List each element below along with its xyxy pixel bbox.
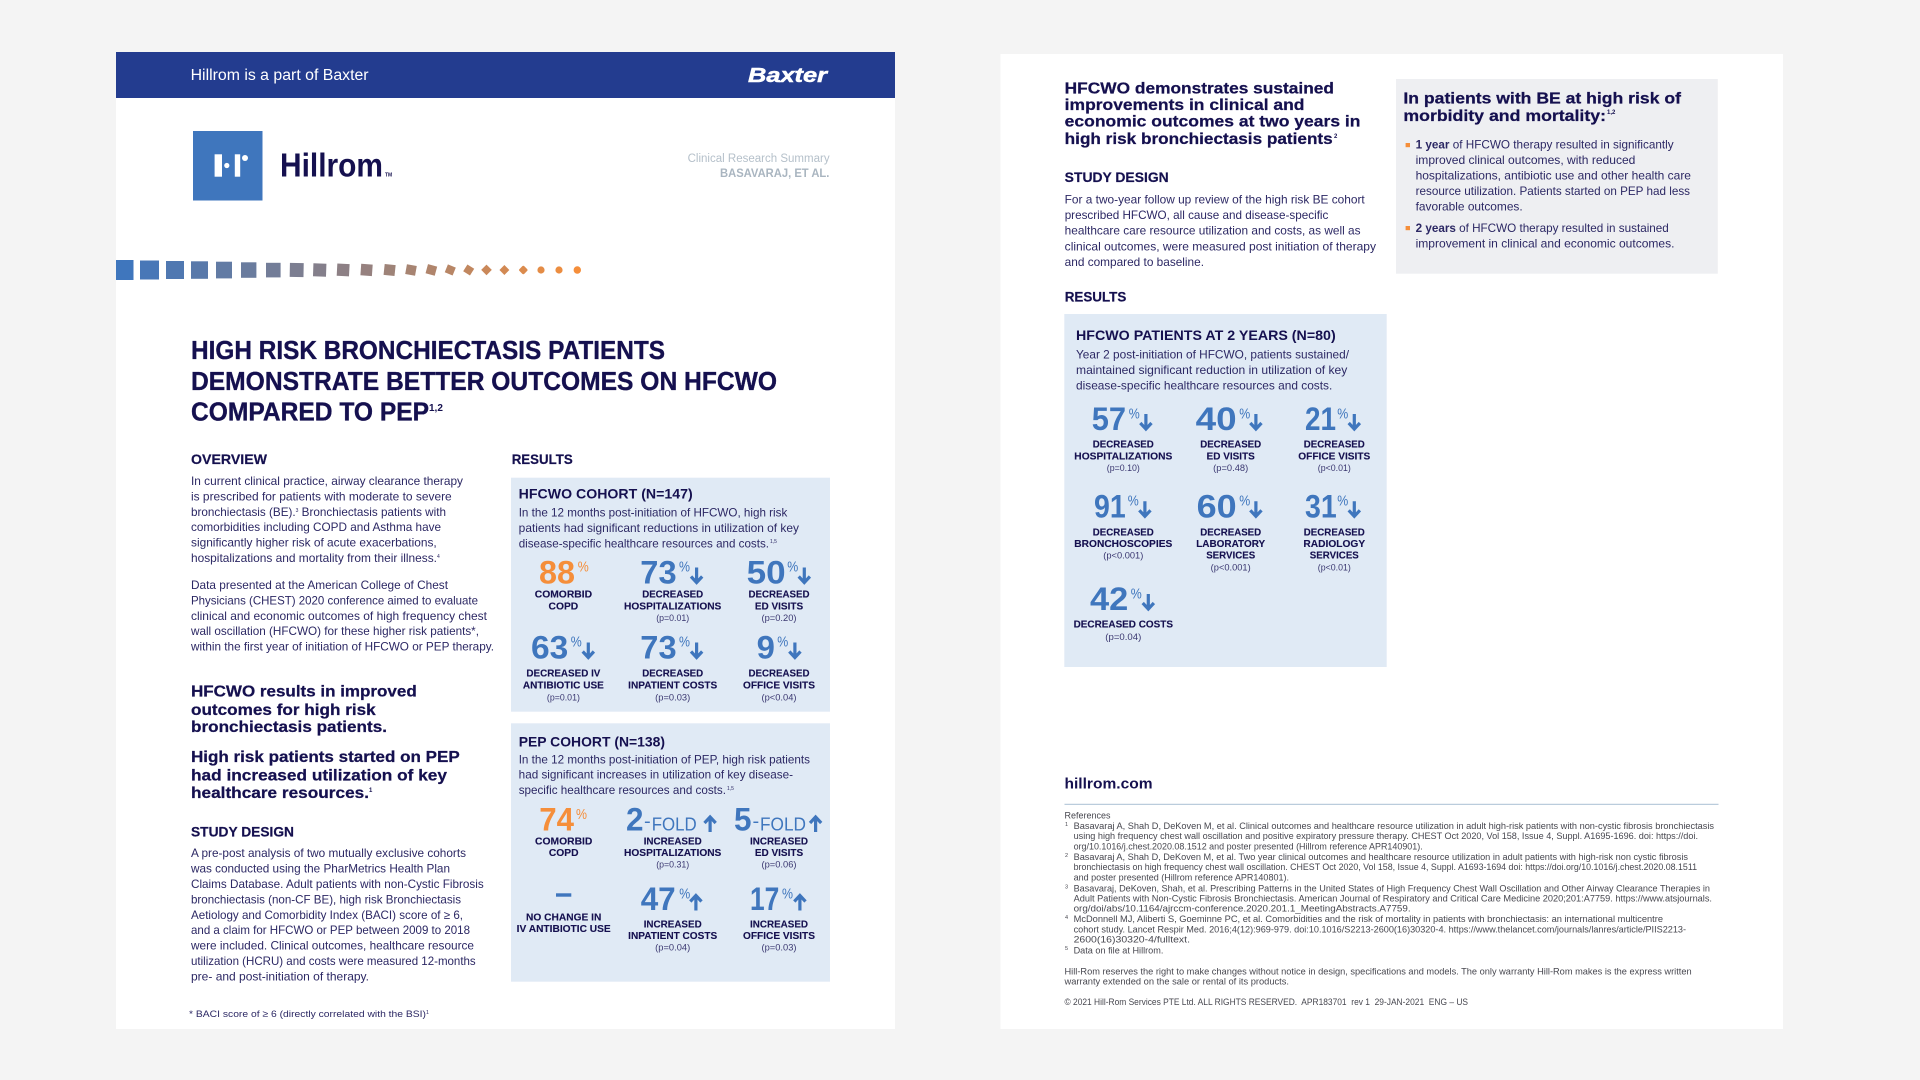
stat: 60% decreased laboratory services	[1196, 488, 1266, 573]
panel intro text: 1,5	[770, 539, 777, 545]
panel intro text: patients had significant reductions in utilization of key	[519, 522, 799, 535]
stat: 73% decreased hospitalizations: %	[679, 559, 690, 576]
stat: 40% decreased ED visits	[1196, 401, 1262, 473]
panel: HFCWO cohort	[511, 478, 830, 712]
overview text	[190, 475, 494, 654]
stat: 9% decreased office visits: OFFICE VISITS	[743, 680, 815, 691]
study design text: was conducted using the PharMetrics Health Plan	[190, 863, 450, 876]
stat: 2-fold increased hospitalizations: -	[644, 811, 651, 831]
key finding: PEP	[191, 749, 460, 802]
stat: 91% decreased bronchoscopies: BRONCHOSCOPIES	[1074, 539, 1173, 550]
overview text: bronchiectasis (BE).	[191, 506, 296, 519]
stat: 40% decreased ED visits: %	[1239, 405, 1250, 422]
stat: 42% decreased costs: %	[1131, 585, 1142, 602]
stat: 40% decreased ED visits: (p=0.48)	[1213, 463, 1248, 473]
stat: 21% decreased office visits	[1298, 401, 1371, 473]
stat: 60% decreased laboratory services: %	[1239, 493, 1250, 510]
takeaway heading: morbidity and mortality:	[1403, 108, 1606, 125]
stat: 5-fold increased ED visits: 5	[734, 802, 752, 838]
takeaway heading: In patients with BE at high risk of	[1403, 90, 1682, 107]
stat: 91% decreased bronchoscopies: (p<0.001)	[1103, 551, 1143, 561]
overview text: In current clinical practice, airway clearance therapy	[191, 475, 463, 488]
bullet: 1 year: 1 year of HFCWO therapy resulted in significantly	[1416, 138, 1674, 151]
stat: 88% comorbid COPD	[535, 554, 592, 612]
heading: sustained improvements: 2	[1334, 134, 1338, 140]
stat: 40% decreased ED visits: 40	[1196, 401, 1237, 437]
stat: 9% decreased office visits: (p<0.04)	[762, 692, 797, 702]
overview text: Bronchiectasis patients with	[298, 506, 446, 519]
stat: 74% comorbid COPD: 74	[539, 802, 574, 838]
stat: 60% decreased laboratory services: (p<0.001)	[1211, 563, 1251, 573]
stat: 50% decreased ED visits: %	[787, 559, 798, 576]
stat: 74% comorbid COPD: COPD	[549, 848, 579, 859]
stat: 50% decreased ED visits: 50	[747, 554, 786, 590]
panel intro text: disease-specific healthcare resources and costs.	[1076, 379, 1332, 392]
bullet: 2 years	[1406, 222, 1674, 251]
references: Adult Patients with Non-Cystic Fibrosis Bronchiectasis. American Journal of Respiratory and Critical Care Medicine 2020;201:A7759. https://www.atsjournals.	[1074, 893, 1712, 903]
stat: 73% decreased hospitalizations: 73	[640, 554, 677, 590]
panel intro text: In the 12 months post-initiation of PEP, high risk patients	[519, 753, 810, 766]
stat: 60% decreased laboratory services: DECREASED	[1200, 527, 1261, 538]
footnote: 1	[426, 1010, 429, 1016]
references: 4	[1065, 915, 1068, 921]
stat: 60% decreased laboratory services: 60	[1197, 488, 1237, 524]
title: 1,2	[429, 403, 443, 414]
panel intro text: had significant increases in utilization of key disease-	[519, 769, 793, 782]
legal notice: warranty extended on the sale or rental of its products.	[1063, 977, 1289, 987]
stat: 21% decreased office visits: %	[1337, 405, 1348, 422]
key finding: PEP: had increased utilization of key	[191, 768, 447, 785]
stat: no change in IV antibiotic use	[517, 893, 611, 935]
stat: 17% increased office visits: INCREASED	[750, 919, 808, 930]
overview text: within the first year of initiation of HFCWO or PEP therapy.	[190, 641, 494, 654]
study design text: utilization (HCRU) and costs were measured 12-months	[191, 955, 476, 968]
panel heading: HFCWO COHORT (N=147)	[519, 485, 693, 501]
heading: sustained improvements: improvements in clinical and	[1065, 97, 1304, 114]
stat: no change in IV antibiotic use: IV ANTIBIOTIC USE	[517, 924, 611, 935]
stat: 74% comorbid COPD	[535, 802, 592, 859]
bullet: 1 year	[1406, 138, 1691, 214]
heading: sustained improvements	[1065, 80, 1360, 148]
stat: 88% comorbid COPD: %	[578, 559, 589, 576]
study design text: healthcare care resource utilization and costs, as well as	[1065, 225, 1361, 238]
key finding: HFCWO	[191, 683, 417, 736]
study design text: were included. Clinical outcomes, healthcare resource	[190, 940, 474, 953]
stat: 40% decreased ED visits: DECREASED	[1200, 440, 1261, 451]
key finding: PEP: healthcare resources.	[191, 785, 369, 802]
stat: 9% decreased office visits: %	[777, 634, 788, 651]
panel heading: HFCWO PATIENTS AT 2 YEARS (N=80)	[1076, 327, 1336, 343]
stat: 91% decreased bronchoscopies	[1074, 488, 1173, 561]
stat: 74% comorbid COPD: %	[576, 806, 587, 823]
stat: 73% decreased inpatient costs: 73	[640, 629, 677, 665]
stat: 17% increased office visits: OFFICE VISITS	[743, 931, 815, 942]
stat: 31% decreased radiology services: DECREASED	[1304, 527, 1365, 538]
stat: 73% decreased hospitalizations: (p=0.01)	[656, 613, 689, 623]
bullet: 1 year: resource utilization. Patients started on PEP had less	[1416, 185, 1690, 198]
overview text: clinical and economic outcomes of high frequency chest	[191, 610, 488, 623]
stat: 50% decreased ED visits: ED VISITS	[755, 601, 803, 612]
references: org/doi/abs/10.1164/ajrccm-conference.2020.201.1_MeetingAbstracts.A7759.	[1074, 904, 1411, 914]
stat: 5-fold increased ED visits: (p=0.06)	[762, 860, 797, 870]
stat: 91% decreased bronchoscopies: %	[1128, 493, 1139, 510]
title: COMPARED TO PEP	[191, 399, 429, 427]
takeaway heading	[1403, 90, 1682, 125]
stat: 21% decreased office visits: OFFICE VISITS	[1298, 451, 1371, 462]
stat: 40% decreased ED visits: ED VISITS	[1207, 451, 1255, 462]
stat: 2-fold increased hospitalizations: HOSPITALIZATIONS	[624, 848, 722, 859]
study design text: clinical outcomes, were measured post initiation of therapy	[1065, 240, 1376, 253]
overview text: hospitalizations and mortality from their illness.	[191, 552, 437, 565]
study design text: Claims Database. Adult patients with non-Cystic Fibrosis	[191, 878, 484, 891]
stat: 5-fold increased ED visits	[734, 802, 821, 870]
stat: 57% decreased hospitalizations: %	[1129, 405, 1140, 422]
stat: 9% decreased office visits: DECREASED	[748, 669, 810, 680]
stat: 17% increased office visits: %	[782, 885, 793, 902]
stat: 73% decreased hospitalizations: HOSPITALIZATIONS	[624, 601, 722, 612]
study design heading: STUDY DESIGN	[1065, 170, 1169, 185]
legal notice: Hill-Rom reserves the right to make changes without notice in design, specifications and models. The only warranty Hill-Rom makes is the express written	[1064, 966, 1692, 976]
overview text: wall oscillation (HFCWO) for these higher risk patients*,	[190, 625, 479, 638]
stat: 42% decreased costs: DECREASED COSTS	[1074, 620, 1173, 631]
references: Data on file at Hillrom.	[1074, 945, 1163, 955]
stat: 17% increased office visits: 17	[750, 881, 779, 917]
study design text: For a two-year follow up review of the high risk BE cohort	[1065, 193, 1365, 206]
bullet: 1 year: hospitalizations, antibiotic use and other health care	[1416, 169, 1691, 182]
stat: 63% decreased IV antibiotic use: (p=0.01)	[547, 692, 580, 702]
references: bronchiectasis on high frequency chest wall oscillation. CHEST Oct 2020, Vol 158, Issue 4, Suppl. A1693-1694 doi: https://doi.org/10.1016/j.chest.2020.08.1511	[1074, 862, 1697, 872]
panel: PEP cohort	[511, 723, 830, 982]
stat: 88% comorbid COPD: COPD	[549, 601, 578, 612]
stat: 63% decreased IV antibiotic use: 63	[531, 629, 568, 665]
stat: 73% decreased hospitalizations: DECREASED	[642, 590, 703, 601]
stat: 73% decreased inpatient costs: %	[679, 634, 690, 651]
study design text	[190, 847, 484, 983]
references: and poster presented (Hillrom reference APR140801).	[1074, 873, 1289, 883]
stat: 2-fold increased hospitalizations: (p=0.31)	[656, 860, 689, 870]
stat: 2-fold increased hospitalizations	[624, 802, 722, 870]
legal notice	[1063, 966, 1692, 987]
panel intro text: specific healthcare resources and costs.	[519, 784, 726, 797]
study design text: and compared to baseline.	[1065, 256, 1204, 269]
references	[1064, 810, 1715, 955]
study design heading: STUDY DESIGN	[191, 824, 294, 840]
references: cohort study. Lancet Respir Med. 2016;4(12):969-979. doi:10.1016/S2213-2600(16)30320-4. https://www.thelancet.com/journals/lanres/article/PIIS2213-	[1074, 924, 1686, 934]
document type label	[688, 153, 830, 180]
copyright: © 2021 Hill-Rom Services PTE Ltd. ALL RIGHTS RESERVED. APR183701 rev 1 29-JAN-2021 ENG – US	[1064, 997, 1468, 1007]
stat: 5-fold increased ED visits: -	[752, 811, 759, 831]
bullet: 1 year: improved clinical outcomes, with reduced	[1416, 154, 1635, 167]
bullet: 2 years: 2 years of HFCWO therapy resulted in sustained	[1416, 222, 1669, 235]
panel intro text: disease-specific healthcare resources and costs.	[519, 537, 769, 550]
stat: 31% decreased radiology services	[1303, 488, 1365, 573]
stat: 31% decreased radiology services: SERVICES	[1310, 551, 1359, 562]
stat: 21% decreased office visits: DECREASED	[1304, 440, 1365, 451]
stat: 73% decreased inpatient costs: INPATIENT COSTS	[628, 680, 718, 691]
stat: 47% increased inpatient costs	[628, 881, 718, 953]
stat: 88% comorbid COPD: 88	[539, 554, 575, 590]
panel intro text: 1,5	[727, 786, 734, 792]
references: References	[1064, 810, 1111, 820]
document type label: BASAVARAJ, ET AL.	[720, 168, 829, 180]
study design text: Aetiology and Comorbidity Index (BACI) score of ≥ 6,	[191, 909, 463, 922]
key finding: PEP: 1	[369, 788, 373, 794]
stat: 17% increased office visits: (p=0.03)	[762, 943, 797, 953]
panel intro text	[1076, 348, 1350, 392]
results heading: RESULTS	[512, 452, 573, 467]
stat: 47% increased inpatient costs: (p=0.04)	[655, 943, 690, 953]
references: 5	[1065, 946, 1068, 952]
stat: 2-fold increased hospitalizations: 2	[626, 802, 644, 838]
panel intro text: In the 12 months post-initiation of HFCWO, high risk	[519, 507, 787, 520]
references: 2600(16)30320-4/fulltext.	[1074, 935, 1190, 945]
stat: 42% decreased costs	[1074, 581, 1173, 642]
logo: Hillrom: Hillrom	[280, 146, 383, 184]
bullet: 1 year: favorable outcomes.	[1416, 201, 1523, 214]
document type label: Clinical Research Summary	[688, 153, 830, 165]
panel: left page	[116, 52, 895, 1029]
stat: 57% decreased hospitalizations: 57	[1092, 401, 1126, 437]
study design text: prescribed HFCWO, all cause and disease-specific	[1065, 209, 1329, 222]
references: using high frequency chest wall oscillation and positive expiratory pressure therapy. CHEST Oct 2020, Vol 158, Issue 4, Suppl. A1695-1696. doi: https://doi.	[1074, 831, 1698, 841]
stat: 21% decreased office visits: (p<0.01)	[1318, 463, 1351, 473]
stat: 91% decreased bronchoscopies: 91	[1094, 488, 1126, 524]
stat: 57% decreased hospitalizations: DECREASED	[1093, 440, 1154, 451]
key finding: HFCWO: bronchiectasis patients.	[191, 719, 387, 736]
heading: sustained improvements: economic outcomes at two years in	[1065, 114, 1360, 131]
stat: 31% decreased radiology services: 31	[1305, 488, 1337, 524]
stat: 91% decreased bronchoscopies: DECREASED	[1093, 527, 1154, 538]
stat: 60% decreased laboratory services: SERVICES	[1206, 551, 1256, 562]
stat: 31% decreased radiology services: RADIOLOGY	[1303, 539, 1365, 550]
stat: 2-fold increased hospitalizations: FOLD	[652, 815, 697, 835]
stat: 57% decreased hospitalizations	[1074, 401, 1173, 473]
key finding: PEP: High risk patients started on PEP	[191, 749, 460, 766]
references: 2	[1065, 853, 1068, 859]
overview text: Physicians (CHEST) 2020 conference aimed to evaluate	[191, 594, 478, 607]
overview text: 4	[437, 554, 440, 560]
stat: 63% decreased IV antibiotic use	[523, 629, 604, 702]
references: Basavaraj, DeKoven, Shah, et al. Prescribing Patterns in the United States of High Frequency Chest Wall Oscillation and Other Airway Clearance Therapies in	[1074, 883, 1710, 893]
stat: 63% decreased IV antibiotic use: ANTIBIOTIC USE	[523, 680, 604, 691]
stat: 9% decreased office visits	[743, 629, 815, 702]
panel intro text	[519, 507, 799, 550]
overview text: comorbidities including COPD and Asthma have	[191, 521, 441, 534]
logo: Hillrom	[193, 131, 392, 200]
key finding: HFCWO: HFCWO results in improved	[191, 683, 417, 700]
stat: 50% decreased ED visits: DECREASED	[748, 590, 810, 601]
stat: 73% decreased hospitalizations	[624, 554, 722, 623]
bullet: 2 years: improvement in clinical and economic outcomes.	[1416, 238, 1674, 251]
references: McDonnell MJ, Aliberti S, Goeminne PC, et al. Comorbidities and the risk of mortality in patients with bronchiectasis: an international multicentre	[1074, 914, 1663, 924]
stat: 50% decreased ED visits	[747, 554, 810, 623]
title	[191, 337, 777, 427]
stat: 73% decreased inpatient costs: (p=0.03)	[655, 692, 690, 702]
stat: 57% decreased hospitalizations: (p=0.10)	[1107, 463, 1140, 473]
header band	[116, 52, 895, 98]
results heading: RESULTS	[1065, 290, 1126, 305]
website: hillrom.com	[1064, 775, 1152, 792]
panel: HFCWO patients at 2 years	[1064, 314, 1387, 667]
study design text: bronchiectasis (non-CF BE), high risk Bronchiectasis	[191, 893, 461, 906]
stat: 5-fold increased ED visits: FOLD	[760, 815, 806, 835]
stat: 9% decreased office visits: 9	[757, 629, 775, 665]
decorative gradient dot strip	[116, 260, 581, 280]
panel intro text: Year 2 post-initiation of HFCWO, patients sustained/	[1076, 348, 1350, 361]
footnote: * BACI score of ≥ 6 (directly correlated with the BSI)	[189, 1009, 409, 1020]
overview text: is prescribed for patients with moderate to severe	[191, 490, 452, 503]
references: Basavaraj A, Shah D, DeKoven M, et al. Clinical outcomes and healthcare resource utilization in adult high-risk patients with non-cystic fibrosis bronchiectasis	[1074, 821, 1715, 831]
panel: key takeaways	[1396, 79, 1718, 274]
stat: 73% decreased inpatient costs: DECREASED	[642, 669, 703, 680]
panel heading: PEP COHORT (N=138)	[519, 734, 665, 750]
overview text: 3	[296, 508, 299, 514]
stat: 42% decreased costs: (p=0.04)	[1105, 632, 1141, 642]
stat: 21% decreased office visits: 21	[1305, 401, 1336, 437]
stat: 47% increased inpatient costs: INPATIENT COSTS	[628, 931, 718, 942]
references: 3	[1065, 884, 1068, 890]
stat: 57% decreased hospitalizations: HOSPITALIZATIONS	[1074, 451, 1173, 462]
stat: 47% increased inpatient costs: 47	[641, 881, 676, 917]
stat: 60% decreased laboratory services: LABORATORY	[1196, 539, 1266, 550]
stat: 42% decreased costs: 42	[1090, 581, 1128, 617]
overview heading: OVERVIEW	[191, 452, 267, 467]
header band: Baxter	[748, 65, 829, 87]
stat: 63% decreased IV antibiotic use: DECREASED IV	[526, 669, 601, 680]
heading: sustained improvements: HFCWO demonstrates sustained	[1065, 80, 1334, 97]
study design text: and a claim for HFCWO or PEP between 2009 to 2018	[191, 924, 470, 937]
stat: no change in IV antibiotic use: NO CHANGE IN	[526, 913, 601, 924]
panel intro text: maintained significant reduction in utilization of key	[1076, 364, 1347, 377]
references: 1	[1065, 822, 1068, 828]
stat: 5-fold increased ED visits: INCREASED	[750, 836, 808, 847]
panel intro text	[519, 753, 810, 797]
takeaway heading: 1,2	[1607, 110, 1616, 116]
stat: 31% decreased radiology services: %	[1337, 493, 1348, 510]
logo: Hillrom: TM	[385, 172, 392, 178]
header band: Hillrom is a part of Baxter	[191, 67, 369, 84]
title: DEMONSTRATE BETTER OUTCOMES ON HFCWO	[191, 368, 777, 396]
study design text: pre- and post-initiation of therapy.	[191, 970, 369, 983]
stat: 88% comorbid COPD: COMORBID	[535, 590, 592, 601]
study design text	[1065, 193, 1376, 269]
heading: sustained improvements: high risk bronchiectasis patients	[1065, 131, 1333, 148]
stat: 50% decreased ED visits: (p=0.20)	[762, 613, 797, 623]
references: Basavaraj A, Shah D, DeKoven M, et al. Two year clinical outcomes and healthcare resource utilization in adult patients with high-risk non cystic fibrosis	[1074, 852, 1689, 862]
study design text: A pre-post analysis of two mutually exclusive cohorts	[191, 847, 466, 860]
references: org/10.1016/j.chest.2020.08.1512 and poster presented (Hillrom reference APR140901).	[1074, 841, 1423, 851]
stat: 63% decreased IV antibiotic use: %	[571, 634, 582, 651]
stat: 74% comorbid COPD: COMORBID	[535, 836, 592, 847]
stat: 73% decreased inpatient costs	[628, 629, 718, 702]
overview text: Data presented at the American College of Chest	[191, 579, 449, 592]
stat: 47% increased inpatient costs: %	[679, 885, 690, 902]
stat: 2-fold increased hospitalizations: INCREASED	[644, 836, 702, 847]
overview text: significantly higher risk of acute exacerbations,	[191, 537, 437, 550]
title: HIGH RISK BRONCHIECTASIS PATIENTS	[191, 337, 665, 365]
stat: 31% decreased radiology services: (p<0.01)	[1318, 563, 1351, 573]
stat: 47% increased inpatient costs: INCREASED	[644, 919, 702, 930]
stat: 17% increased office visits	[743, 881, 815, 953]
key finding: HFCWO: outcomes for high risk	[191, 702, 376, 719]
panel: right page	[1000, 54, 1783, 1029]
stat: 5-fold increased ED visits: ED VISITS	[755, 848, 803, 859]
